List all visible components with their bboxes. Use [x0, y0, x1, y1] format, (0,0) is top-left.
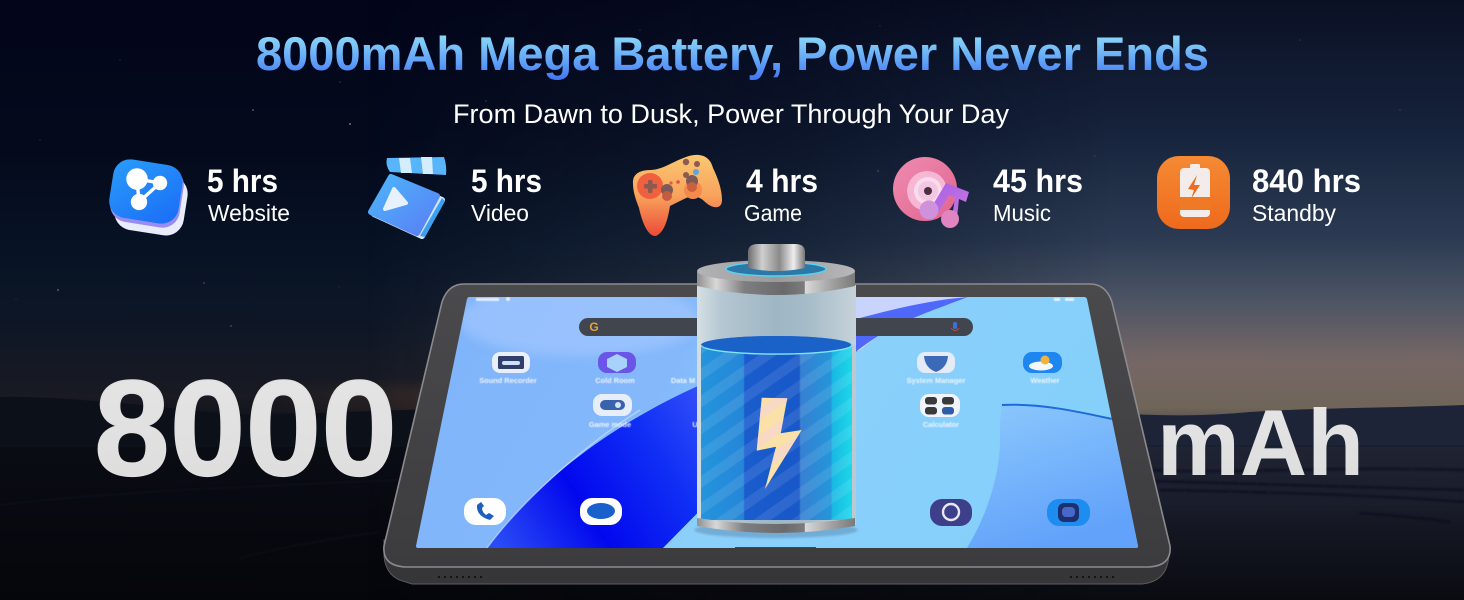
stat: standby — [1157, 156, 1361, 229]
app labels row 2 — [588, 421, 960, 428]
big number 8000: 8000 — [94, 352, 397, 504]
app labels row 1: Cold Room — [595, 376, 635, 385]
value: 5 hrs — [471, 163, 542, 199]
label: Website — [208, 200, 290, 226]
stat: music — [893, 157, 1083, 228]
battery top collar — [697, 272, 855, 295]
title: 8000mAh Mega Battery, Power Never Ends — [256, 27, 1209, 80]
tablet speakers — [438, 576, 1114, 578]
battery liquid — [697, 336, 856, 523]
tablet body side — [384, 540, 1170, 584]
app labels row 1: Sound Recorder — [479, 376, 537, 385]
subtitle: From Dawn to Dusk, Power Through Your Day — [453, 99, 1009, 129]
value: 840 hrs — [1252, 163, 1361, 199]
app labels row 1 — [479, 377, 1060, 385]
tablet — [384, 284, 1170, 584]
app labels row 1: Data M — [671, 376, 695, 385]
tablet screen — [410, 284, 1145, 549]
battery bottom ring — [697, 518, 855, 533]
battery top disc — [697, 260, 855, 282]
stat: video — [371, 157, 542, 237]
app labels row 1: System Manager — [907, 376, 965, 385]
value: 5 hrs — [207, 163, 278, 199]
app labels row 2: Calculator — [923, 420, 959, 429]
app icons row 2 — [593, 394, 960, 417]
app labels row 1: Weather — [1030, 376, 1060, 385]
bottom notch — [735, 547, 816, 548]
cyan ring — [726, 262, 826, 276]
status bar — [476, 297, 1074, 301]
search bar: G — [589, 320, 599, 334]
icon: video clapper — [371, 157, 446, 237]
dock icons — [464, 498, 1090, 526]
battery terminal — [748, 244, 805, 271]
search bar — [579, 318, 973, 336]
icon: website share — [107, 157, 190, 238]
big unit mAh: mAh — [1157, 390, 1364, 495]
value: 4 hrs — [746, 163, 818, 199]
lightning bolt — [757, 398, 802, 489]
app labels row 2: U — [692, 420, 698, 429]
battery — [694, 244, 858, 538]
label: Video — [471, 200, 529, 226]
stat: game — [633, 155, 818, 236]
icon: game controller — [633, 155, 722, 236]
app icons row 1 — [492, 352, 1062, 373]
battery glass — [697, 285, 856, 525]
stat: website — [107, 157, 290, 238]
label: Standby — [1252, 200, 1336, 226]
tablet front bezel — [384, 284, 1170, 567]
value: 45 hrs — [993, 163, 1083, 199]
label: Game — [744, 200, 802, 226]
icon: music disc and note — [893, 157, 969, 228]
battery shadow — [694, 522, 858, 538]
icon: orange battery — [1157, 156, 1230, 229]
label: Music — [993, 200, 1051, 226]
app labels row 2: Game mode — [589, 420, 631, 429]
